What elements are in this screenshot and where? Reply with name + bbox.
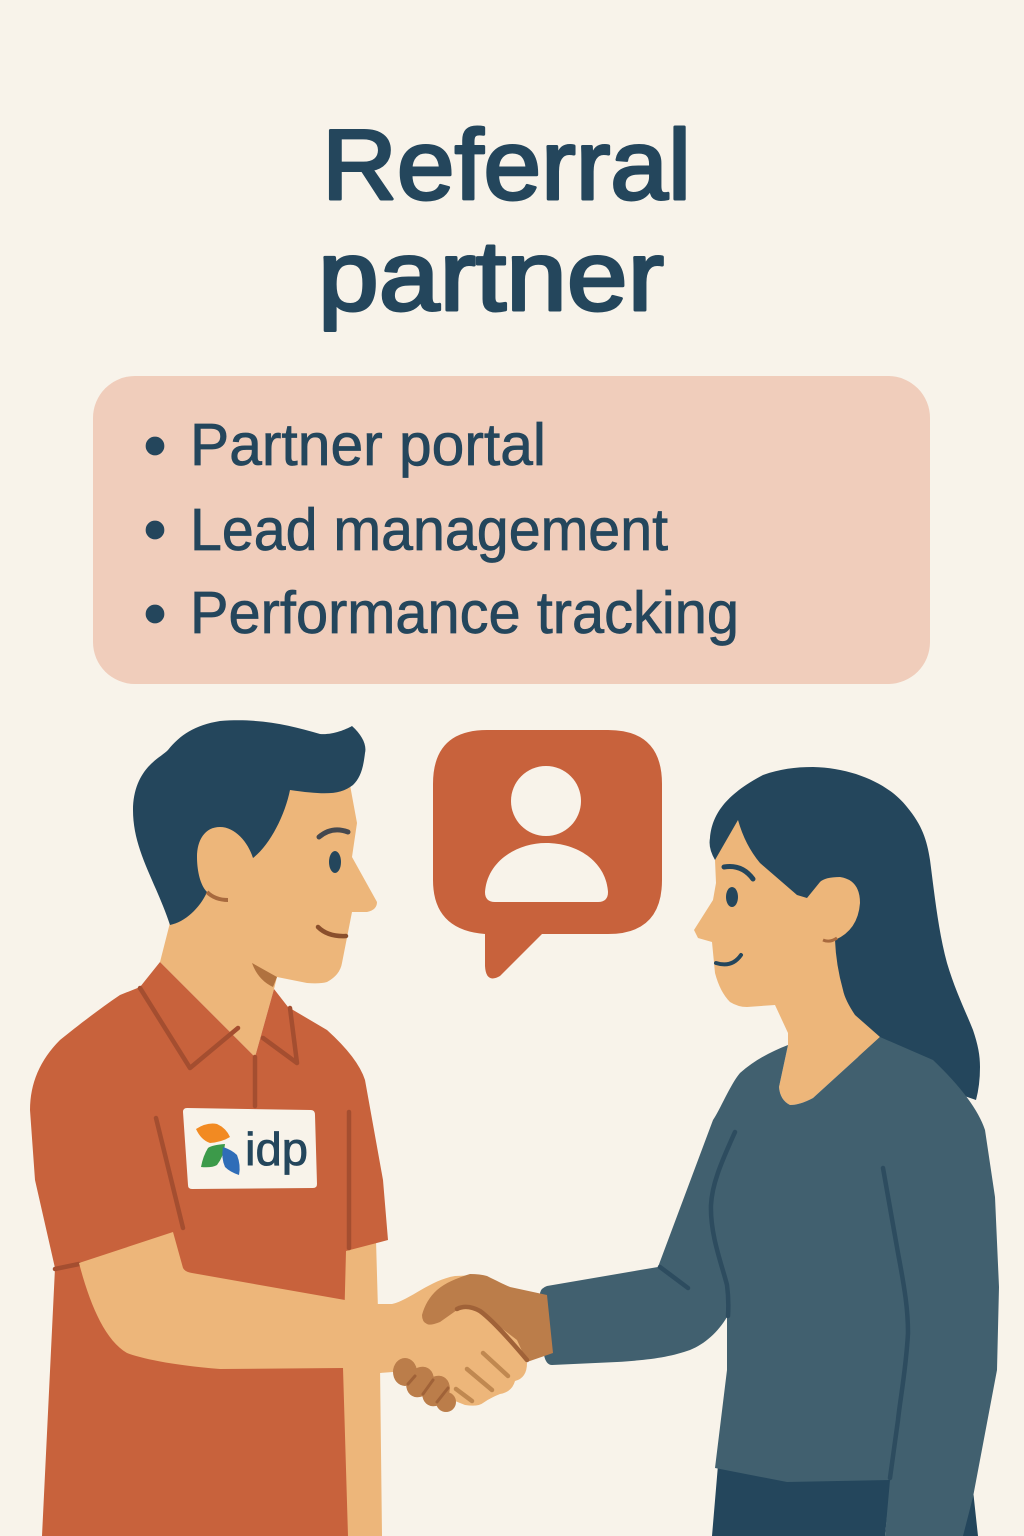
illustration: man	[30, 720, 527, 1536]
trousers	[712, 1465, 978, 1536]
logo leaves	[196, 1124, 230, 1143]
jaw shadow	[252, 963, 277, 987]
face and neck	[694, 820, 880, 1105]
hanging arm	[340, 1240, 382, 1536]
ear shadow	[207, 892, 228, 900]
illustration: woman	[540, 767, 999, 1536]
mouth	[716, 955, 741, 964]
list item: performance tracking: Performance tracking	[190, 580, 739, 646]
collar and shirt seams	[55, 988, 349, 1269]
forearm and hand	[79, 1232, 527, 1406]
sweater seams	[660, 1132, 908, 1478]
illustration: handshake	[393, 1274, 553, 1412]
long hair	[710, 767, 980, 1100]
finger creases	[408, 1376, 448, 1402]
mouth	[318, 927, 346, 936]
eye and brow	[329, 851, 341, 873]
polo shirt	[30, 962, 388, 1536]
sweater	[540, 1037, 999, 1536]
list item: lead management: Lead management	[190, 497, 668, 563]
title: partner	[318, 220, 664, 331]
title	[318, 109, 691, 331]
partner hand	[422, 1274, 553, 1362]
eye and brow	[726, 887, 738, 907]
icon: speech bubble with person	[433, 730, 662, 978]
name badge	[183, 1108, 317, 1189]
hair	[133, 720, 365, 925]
head and neck	[160, 770, 377, 1057]
partner fingers	[393, 1358, 417, 1386]
panel: feature list	[93, 376, 930, 684]
logo wordmark: idp	[245, 1123, 308, 1175]
list item: partner portal: Partner portal	[190, 412, 546, 478]
title: Referral	[322, 109, 691, 220]
ear shadow	[823, 938, 837, 941]
